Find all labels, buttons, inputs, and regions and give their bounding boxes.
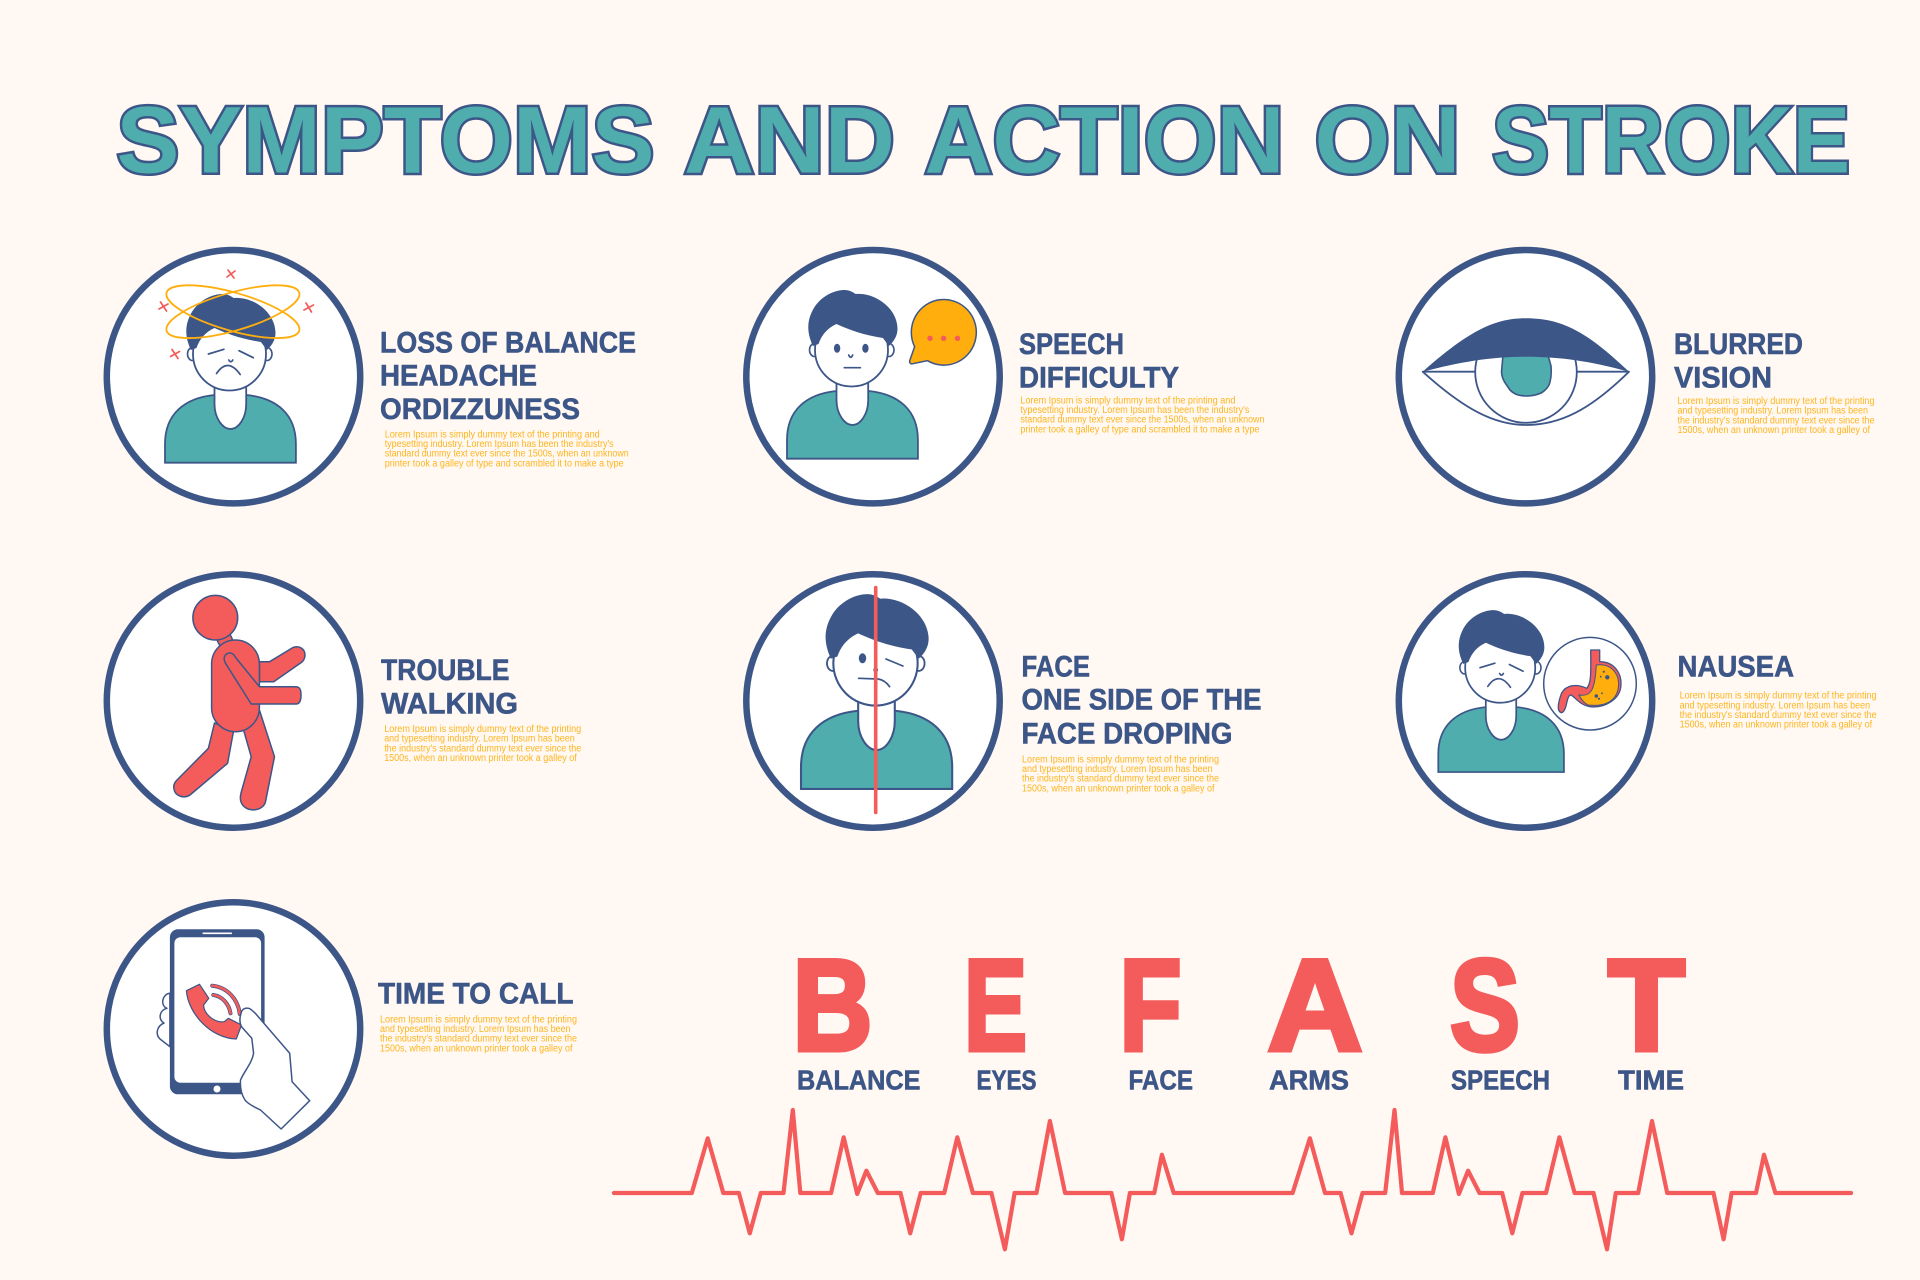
- body text: Lorem Ipsum is simply dummy text of the printing and: [385, 429, 600, 440]
- BEFAST acronym: [792, 932, 1685, 1095]
- body text: printer took a galley of type and scrambled it to make a type: [1020, 424, 1260, 435]
- body text: and typesetting industry. Lorem Ipsum has been: [1022, 764, 1212, 775]
- heading: [380, 326, 636, 426]
- heading: [1674, 328, 1803, 394]
- icon: dizzy person: [159, 270, 314, 463]
- title: [116, 88, 1850, 194]
- body text: [1020, 395, 1264, 435]
- heading: [1019, 328, 1179, 394]
- letter E: EYES: [976, 1064, 1036, 1095]
- panel: trouble walking: [107, 574, 582, 828]
- body text: and typesetting industry. Lorem Ipsum has been: [1678, 406, 1868, 417]
- title: AND: [684, 88, 895, 194]
- body text: Lorem Ipsum is simply dummy text of the printing: [384, 724, 581, 735]
- body text: and typesetting industry. Lorem Ipsum has been: [380, 1024, 570, 1035]
- icon: eye: [1423, 318, 1629, 425]
- body text: [1022, 754, 1219, 794]
- title: ACTION: [924, 88, 1284, 194]
- body text: typesetting industry. Lorem Ipsum has been the industry's: [385, 439, 614, 450]
- body text: the industry's standard dummy text ever since the: [380, 1034, 577, 1045]
- letter T: T: [1608, 932, 1685, 1078]
- letter B: B: [792, 932, 872, 1078]
- letter E: E: [964, 932, 1027, 1078]
- badge circle: [746, 574, 1000, 828]
- badge circle: [746, 250, 1000, 503]
- body text: 1500s, when an unknown printer took a galley of: [384, 753, 577, 764]
- badge circle: [107, 902, 360, 1156]
- body text: Lorem Ipsum is simply dummy text of the printing and: [1020, 395, 1235, 406]
- body text: Lorem Ipsum is simply dummy text of the printing: [380, 1014, 577, 1025]
- panel: face drooping: [746, 574, 1262, 828]
- title: SYMPTOMS: [116, 88, 654, 194]
- icon: hand holding phone: [157, 929, 310, 1129]
- heading: TIME TO CALL: [378, 977, 574, 1010]
- letter B: [792, 932, 920, 1095]
- heading: DIFFICULTY: [1019, 361, 1179, 394]
- body text: Lorem Ipsum is simply dummy text of the printing: [1680, 691, 1877, 702]
- body text: [380, 1014, 577, 1054]
- icon: walking figure: [174, 595, 305, 810]
- letter F: FACE: [1128, 1064, 1193, 1095]
- body text: the industry's standard dummy text ever since the: [384, 743, 582, 754]
- body text: standard dummy text ever since the 1500s, when an unknown: [385, 449, 629, 460]
- badge circle: [1399, 250, 1652, 503]
- heading: TROUBLE: [381, 654, 510, 687]
- panel: blurred vision: [1399, 250, 1875, 503]
- body text: typesetting industry. Lorem Ipsum has been the industry's: [1020, 405, 1249, 416]
- letter A: ARMS: [1269, 1064, 1349, 1095]
- badge circle: [107, 250, 360, 503]
- heading: [1022, 651, 1262, 750]
- body text: and typesetting industry. Lorem Ipsum has been: [384, 734, 575, 745]
- icon: person with speech bubble: [787, 290, 976, 459]
- body text: 1500s, when an unknown printer took a galley of: [1680, 720, 1872, 731]
- heading: WALKING: [381, 687, 518, 720]
- title: STROKE: [1492, 88, 1850, 194]
- panel: time to call: [107, 902, 577, 1156]
- letter B: BALANCE: [797, 1064, 920, 1095]
- body text: Lorem Ipsum is simply dummy text of the printing: [1022, 754, 1219, 765]
- panel: nausea: [1399, 574, 1877, 828]
- ECG heartbeat line: [614, 1110, 1851, 1249]
- heading: VISION: [1674, 361, 1772, 394]
- heading: FACE: [1022, 651, 1090, 684]
- body text: the industry's standard dummy text ever since the: [1680, 710, 1877, 721]
- body text: the industry's standard dummy text ever since the: [1678, 415, 1875, 426]
- panel: loss of balance: [107, 250, 636, 503]
- body text: printer took a galley of type and scrambled it to make a type: [385, 458, 624, 469]
- panel: speech difficulty: [746, 250, 1264, 503]
- badge circle: [1399, 574, 1652, 828]
- body text: [1680, 691, 1877, 731]
- heading: NAUSEA: [1678, 651, 1794, 684]
- body text: the industry's standard dummy text ever since the: [1022, 774, 1219, 785]
- letter T: TIME: [1618, 1064, 1684, 1095]
- heading: ONE SIDE OF THE: [1022, 684, 1262, 717]
- body text: Lorem Ipsum is simply dummy text of the printing: [1678, 396, 1874, 407]
- heading: FACE DROPING: [1022, 717, 1232, 750]
- heading: SPEECH: [1019, 328, 1124, 361]
- heading: [381, 654, 518, 720]
- icon: face split with red line: [801, 588, 952, 812]
- letter S: SPEECH: [1451, 1064, 1550, 1095]
- body text: 1500s, when an unknown printer took a galley of: [1678, 425, 1870, 436]
- body text: [1678, 396, 1875, 436]
- body text: [385, 429, 629, 469]
- icon: nauseous person with stomach: [1438, 610, 1636, 772]
- body text: standard dummy text ever since the 1500s, when an unknown: [1020, 415, 1264, 426]
- letter S: S: [1450, 932, 1520, 1078]
- letter A: A: [1268, 932, 1362, 1078]
- title: ON: [1314, 88, 1460, 194]
- heading: ORDIZZUNESS: [380, 393, 580, 426]
- body text: 1500s, when an unknown printer took a galley of: [380, 1043, 573, 1054]
- heading: BLURRED: [1674, 328, 1803, 361]
- heading: HEADACHE: [380, 360, 537, 393]
- body text: 1500s, when an unknown printer took a galley of: [1022, 783, 1215, 794]
- letter F: F: [1120, 932, 1182, 1078]
- body text: [384, 724, 582, 764]
- body text: and typesetting industry. Lorem Ipsum has been: [1680, 700, 1870, 711]
- heading: LOSS OF BALANCE: [380, 326, 636, 359]
- badge circle: [107, 574, 360, 828]
